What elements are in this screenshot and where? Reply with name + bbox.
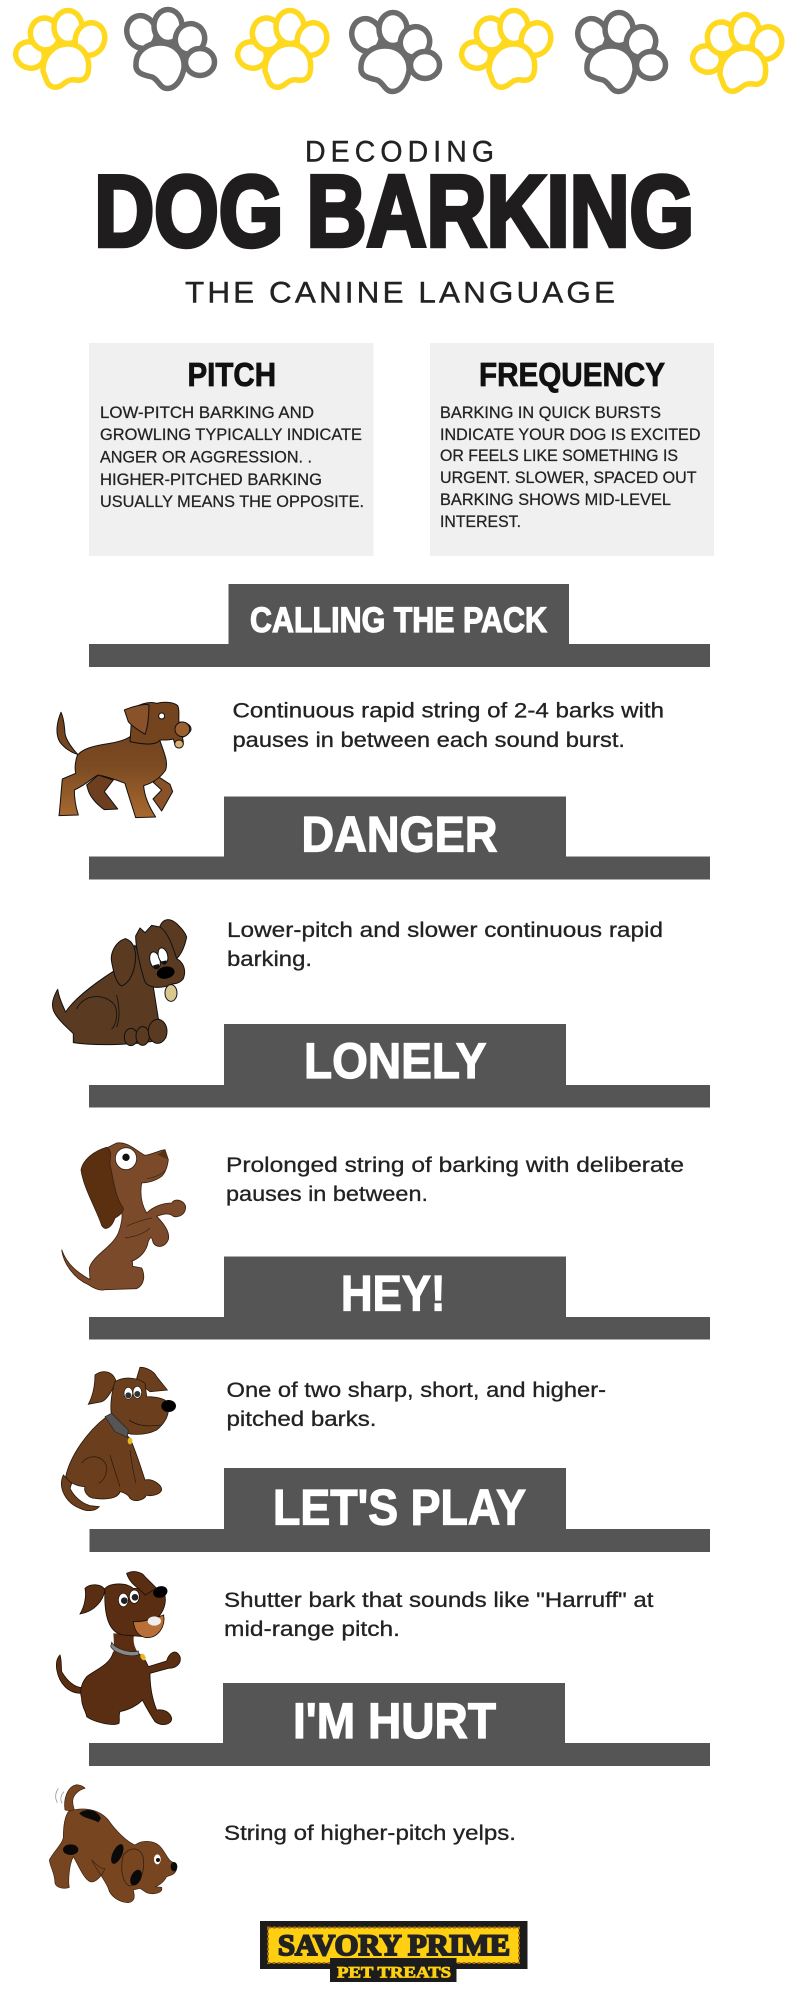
logo: savory prime pet treats [260,1921,528,1982]
body [57,712,167,818]
paw row [12,10,787,92]
logo tab [330,1958,456,1982]
section header: hey [89,1256,710,1340]
back spot [79,1810,101,1822]
text: i'm hurt: String of higher-pitch yelps. [224,1822,516,1845]
heading text: LET'S PLAY [273,1480,526,1536]
text: calling the pack: pauses in between each sound burst. [232,729,625,752]
ear [122,1849,144,1886]
ball [133,1615,164,1638]
pupils [153,960,167,969]
tag [128,1438,132,1444]
mouth line [125,1171,165,1238]
eye [159,713,165,719]
section header: calling the pack [89,584,710,667]
left ear [80,1585,105,1614]
text: calling the pack: Continuous rapid string of 2-4 barks with [232,700,664,722]
head [111,1378,169,1434]
collar [105,1413,128,1437]
smile [129,1420,161,1426]
neck [113,1633,139,1654]
muzzle [175,722,190,737]
head [136,925,185,987]
text: let's play: Shutter bark that sounds like "Harruff" at [224,1589,654,1612]
text: let's play: mid-range pitch. [224,1618,400,1641]
icon: grey paw 2 [122,10,214,88]
panel: frequency [430,343,714,556]
tail [61,1475,99,1511]
nose [156,965,176,980]
icon: yellow paw 3 [234,10,332,87]
heading text: LONELY [304,1033,486,1089]
head [105,1584,165,1637]
icon: dog standing [57,702,191,818]
section header: i'm hurt [89,1683,710,1766]
icon: dog with ball [56,1572,180,1725]
haunch line [77,997,117,1029]
chest line [117,995,119,1027]
paws [124,1019,167,1046]
ear [124,705,149,734]
icon: dog begging [62,1143,186,1290]
title: decoding: DECODING [305,136,494,169]
icon: spotted dog [49,1785,177,1903]
body [81,1652,180,1725]
body lines [82,1450,136,1487]
text: danger: Lower-pitch and slower continuous rapid [227,919,663,942]
collar [111,1642,139,1656]
subtitle: THE CANINE LANGUAGE [185,275,615,309]
shoulder spot [109,1842,126,1866]
text: pitch description: LOW-PITCH BARKING AND [100,404,314,422]
section header: danger [89,796,710,880]
title block [94,136,694,309]
icon: dog sitting with tongue out [52,920,187,1046]
text: frequency description: OR FEELS LIKE SOMETHING IS [440,447,678,465]
nose [171,1862,177,1871]
panel: pitch [89,343,374,556]
icon: yellow paw 5 [458,10,556,87]
icon: yellow paw 1 [12,10,110,87]
text: hey [226,1379,606,1431]
head [130,702,191,748]
heading: pitch: PITCH [188,356,276,393]
text: frequency description: INTEREST. [440,513,521,531]
tongue [165,985,177,1001]
pupil [122,1154,130,1161]
motion lines [56,1788,64,1803]
tail [65,1785,85,1812]
eyes [148,951,162,970]
text: frequency description: BARKING SHOWS MID-LEVEL [440,491,671,509]
text: frequency description: URGENT. SLOWER, SPACED OUT [440,469,696,487]
body [62,1143,186,1290]
body [52,945,166,1045]
icon: yellow paw 7 [689,14,787,91]
tongue [175,740,183,748]
heading text: HEY! [341,1266,446,1322]
icon: dog with collar [61,1367,176,1511]
body [49,1809,177,1903]
text: pitch description: USUALLY MEANS THE OPPOSITE. [100,493,364,511]
eye [115,1148,137,1170]
text: pitch description: HIGHER-PITCHED BARKING [100,471,322,489]
text: pitch description: GROWLING TYPICALLY INDICATE [100,426,362,444]
heading: frequency: FREQUENCY [479,356,665,393]
logo wordmark: SAVORY PRIME [278,1929,510,1962]
text: lonely [226,1154,684,1206]
left ear [111,939,136,986]
heading text: I'M HURT [293,1693,496,1749]
text: frequency description [440,404,701,531]
text: hey: One of two sharp, short, and higher- [226,1379,606,1402]
pupil [156,1858,160,1862]
section header: lonely [89,1024,710,1108]
text: danger: barking. [227,948,312,971]
right ear [160,920,187,959]
text: lonely: pauses in between. [226,1183,428,1206]
section header: let's play [90,1468,710,1552]
eyes [118,1593,128,1607]
pupils [121,1597,128,1604]
text: let's play [224,1589,654,1641]
hip spot [63,1844,78,1855]
text: danger [227,919,663,971]
raised leg [153,777,173,811]
left ear [88,1372,116,1404]
nose [161,1400,176,1412]
body [66,1417,162,1501]
pupils [125,1392,131,1398]
far hind leg [87,775,118,810]
ear spot [128,1868,144,1887]
right ear [137,1367,167,1392]
text: frequency description: BARKING IN QUICK BURSTS [440,404,661,422]
heading text: DANGER [302,806,498,862]
ball highlight [148,1616,161,1626]
heading text: CALLING THE PACK [250,601,547,640]
tag [139,1653,147,1661]
icon: grey paw 4 [347,12,440,92]
eyes [124,1387,133,1399]
text: hey: pitched barks. [226,1408,376,1431]
logo tagline: PET TREATS [337,1964,451,1982]
text: pitch description: ANGER OR AGGRESSION. . [100,448,312,466]
text: pitch description [100,404,364,511]
ear [81,1147,123,1228]
nose [151,1584,169,1600]
text: frequency description: INDICATE YOUR DOG IS EXCITED [440,426,701,444]
text: calling the pack [232,700,664,752]
icon: grey paw 6 [573,12,666,92]
nose [157,1150,168,1160]
text: lonely: Prolonged string of barking with deliberate [226,1154,684,1177]
eye [154,1854,161,1864]
tail [56,1655,82,1693]
top ear [127,1572,157,1595]
